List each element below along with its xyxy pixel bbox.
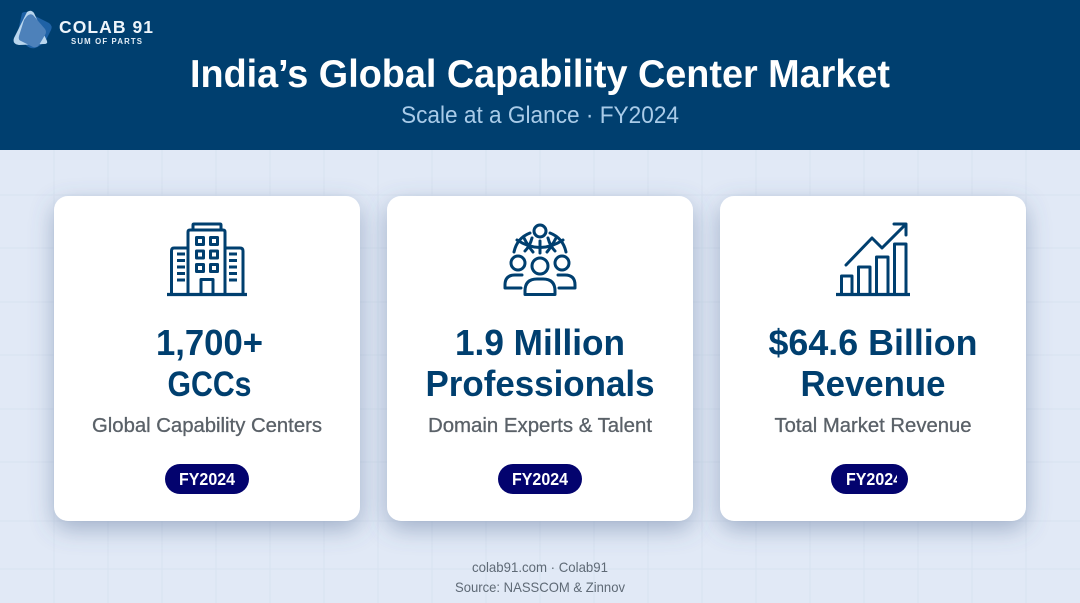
footer source line: Source: NASSCOM & Zinnov — [455, 579, 625, 595]
logo — [14, 11, 153, 48]
metric: 1,700+ GCCs — [156, 322, 263, 404]
subtitle: Scale at a Glance · FY2024 — [401, 102, 679, 129]
footer — [455, 559, 625, 595]
badge: FY2024 clipped: FY2024 — [846, 469, 902, 489]
icon: globe and people — [505, 225, 575, 294]
logo mark — [14, 11, 52, 48]
metric: $64.6 Billion Revenue: Revenue — [800, 363, 946, 404]
icon: office building — [167, 224, 247, 294]
logo tagline: SUM OF PARTS — [71, 37, 142, 46]
metric: 1,700+ GCCs: 1,700+ — [156, 322, 263, 363]
badge: FY2024 — [498, 464, 582, 494]
footer site line: colab91.com · Colab91 — [472, 559, 608, 575]
metric: $64.6 Billion Revenue — [768, 322, 978, 404]
description: Domain Experts & Talent — [428, 415, 652, 437]
metric: 1.9 Million Professionals: Professionals — [426, 363, 654, 404]
panel: Professionals — [387, 196, 693, 521]
description: Total Market Revenue — [774, 415, 972, 437]
panel: GCCs — [54, 196, 360, 521]
header banner — [0, 0, 1080, 150]
badge: FY2024: FY2024 — [179, 469, 235, 489]
metric: $64.6 Billion Revenue: $64.6 Billion — [768, 322, 978, 363]
badge: FY2024 clipped — [831, 464, 908, 494]
panel: Revenue — [720, 196, 1026, 521]
metric: 1,700+ GCCs: GCCs — [168, 365, 252, 404]
title: India’s Global Capability Center Market — [190, 53, 890, 96]
badge: FY2024: FY2024 — [512, 469, 568, 489]
icon: growth chart — [836, 224, 910, 294]
metric: 1.9 Million Professionals — [426, 322, 654, 404]
badge: FY2024 — [165, 464, 249, 494]
metric: 1.9 Million Professionals: 1.9 Million — [455, 322, 625, 363]
logo wordmark: COLAB 91 — [59, 17, 153, 37]
description: Global Capability Centers — [92, 415, 322, 437]
